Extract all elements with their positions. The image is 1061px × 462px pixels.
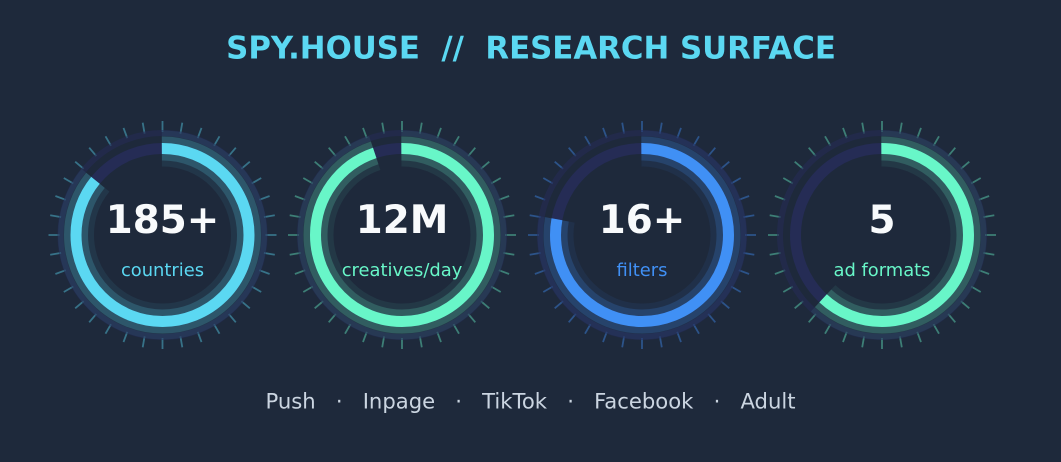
bottom format list: Push · Inpage · TikTok · Facebook · Adult xyxy=(265,388,796,413)
gauge: 5 ad formats xyxy=(768,121,996,349)
gauge: 185+ countries xyxy=(48,121,276,349)
title: SPY.HOUSE // RESEARCH SURFACE xyxy=(226,31,836,67)
gauge: 12M creatives/day: creatives/day xyxy=(342,260,463,281)
gauge: 12M creatives/day: 12M xyxy=(356,198,448,243)
gauge: 5 ad formats: 5 xyxy=(868,198,896,243)
gauge: 5 ad formats: ad formats xyxy=(833,260,931,281)
gauge: 16+ filters xyxy=(528,121,756,349)
gauge: 185+ countries: countries xyxy=(121,260,204,281)
gauge: 12M creatives/day xyxy=(288,121,516,349)
gauge: 16+ filters: filters xyxy=(617,260,667,281)
gauge: 16+ filters: 16+ xyxy=(599,198,685,243)
gauge: 185+ countries: 185+ xyxy=(106,198,219,243)
